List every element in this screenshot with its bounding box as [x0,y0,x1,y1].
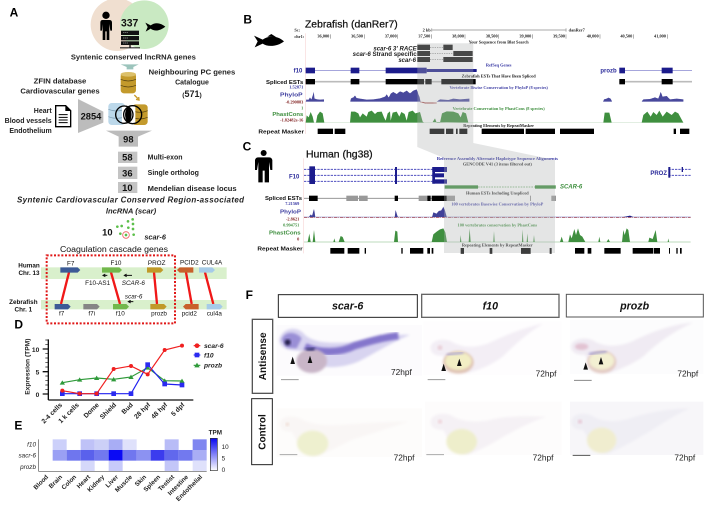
track: PhyloP: 1.52871 [289,84,303,89]
10 scar genes dot cluster [102,218,167,241]
chart legend: scar-6 [204,343,224,350]
heading: human hg38: Human (hg38) [306,149,373,160]
heatmap colour bar: 10 [222,444,229,451]
row header: antisense [252,319,273,393]
gene track: PROZ: PROZ [650,171,667,177]
gene track: SCAR-6: SCAR-6 [560,185,583,191]
browser scale and ruler: 37,500 [418,34,430,39]
heatmap row labels: f10 [27,441,36,448]
chromosome labels: Human [18,263,40,270]
heading: syntenic cardiovascular scar [17,196,245,216]
track captions: 100 vertebrates Basewise Conservation by PhyloP [451,202,544,207]
x axis labels: 2-4 cells [41,402,64,425]
panel letter C: C [243,139,252,153]
track captions: Your Sequence from Blat Search [469,39,529,44]
browser scale and ruler: 38,000 [452,34,464,39]
human genes: PCID2 [180,259,199,266]
chart legend [194,343,224,370]
y axis: 0 [36,392,40,399]
track: PhastCons: 1 [301,106,303,111]
panel letter A: A [10,6,19,20]
track captions: Repeating Elements by RepeatMasker [463,123,534,128]
panel letter B: B [243,12,252,26]
panel D: expression line chart [14,317,224,425]
browser scale and ruler: 36,500 [351,34,363,39]
antisense transcripts: scar-6 [125,293,143,300]
row header: control: Control [257,414,268,450]
track: repeat masker: Repeat Masker [257,247,304,253]
heatmap colour bar: TPM [209,429,222,436]
arrow: teal down [121,64,139,69]
track captions: Reference Assembly Alternate Haplotype Sequence Alignments [437,156,558,161]
browser scale and ruler: Sc: [294,27,301,32]
track captions: Repeating Elements by RepeatMasker [462,243,533,248]
gray arrow: 2854: 2854 [81,111,102,121]
filter step: 10 mendelian disease locus: 10 [122,183,133,193]
chromosome labels: Zebrafish [9,299,38,306]
label: heart, blood vessels, endothelium: Endothelium [9,128,52,135]
browser scale and ruler [294,27,667,39]
y axis [24,339,193,400]
filter step: 58 multi-exon: Multi-exon [148,154,183,161]
heading: zebrafish danRer7: Zebrafish (danRer7) [305,19,398,30]
filter step: 58 multi-exon [118,152,183,163]
filter step: 10 mendelian disease locus: Mendelian disease locus [148,186,237,193]
pink base line [303,158,305,253]
photo: f10 antisense embryo [423,322,562,380]
zebrafish genes: pcid2 [182,311,197,318]
browser scale and ruler: 40,500 [620,34,632,39]
chromosome bands [41,267,227,309]
panel A: coagulation cascade synteny [9,245,227,323]
track: repeat masker: Repeat Masker [258,129,305,135]
zebrafish genes: prozb [151,311,167,318]
heading: syntenic cardiovascular scar: lncRNA (scar) [106,207,157,216]
photo: f10 control embryo [425,402,562,462]
track: PhastCons [269,222,691,242]
heatmap colour bar: 0 [222,467,226,474]
track: PhyloP: PhyloP [280,92,303,98]
10 scar genes dot cluster: scar-6 [144,232,167,241]
browser scale and ruler: chr1: [294,34,305,39]
gene track: PROZ [650,167,691,178]
track: repeat masker [257,247,682,254]
label: neighbouring PC genes catalogue: Neighbouring PC genes [149,70,235,77]
photo: prozb antisense embryo: 72hpf [677,368,699,378]
chromosome labels: Chr. 1 [15,306,33,313]
column header: scar-6 [278,295,417,317]
zebrafish genes: cul4a [207,311,222,318]
icon: gold database [121,72,136,93]
photo: prozb control embryo: 72hpf [674,452,696,462]
label: syntenic conserved lncRNA genes: Syntenic conserved lncRNA genes [71,54,196,61]
track: spliced ESTs [266,79,692,86]
browser scale and ruler: 40,000 [587,34,599,39]
browser scale and ruler: 41,000 [654,34,666,39]
filter step: 36 single ortholog: Single ortholog [148,170,199,177]
track captions: RefSeq Genes [486,62,512,67]
x axis labels [41,401,187,425]
label: neighbouring PC genes catalogue: (571) [182,89,202,99]
human genes [60,259,223,273]
track: PhastCons: PhastCons [269,230,301,236]
icon: zebrafish [254,34,284,47]
heatmap column labels: Testist [157,473,177,493]
heatmap column labels: Spleen [142,474,162,493]
heatmap column labels: Brain [48,474,64,490]
label: ZFIN database cardiovascular genes [20,78,100,95]
x axis labels: 48 hpf [150,401,170,421]
heading: syntenic cardiovascular scar: Syntenic Cardiovascular Conserved Region-associated [17,196,245,205]
label: neighbouring PC genes catalogue [149,70,235,99]
heatmap cells [39,439,207,471]
track: PhyloP: PhyloP [280,209,301,215]
track: repeat masker [258,129,689,135]
track captions [437,156,558,248]
blat alignments: scar-6: scar-6 Strand specific [353,52,417,58]
browser scale and ruler: 36,000 [317,34,329,39]
zebrafish genes [55,304,223,318]
gene track: F10 [289,166,447,184]
heatmap colour bar [209,429,229,474]
series: prozb [60,365,185,385]
filter step: 10 mendelian disease locus [118,182,237,193]
icon: intersecting databases [108,103,148,125]
antisense transcripts: F10-AS1 [85,280,111,287]
label: ZFIN database cardiovascular genes: Cardiovascular genes [20,88,100,95]
heatmap row labels: prozb [19,464,36,471]
row header: control [252,399,272,465]
venn diagram: human and fish overlap [91,0,169,51]
heatmap column labels: Liver [104,473,120,489]
panel letter F: F [246,288,253,302]
browser scale and ruler: 39,500 [553,34,565,39]
x axis labels: Bud [121,402,135,416]
column header: f10 [422,294,559,317]
browser scale and ruler: 2 kb [423,27,431,32]
chromosome labels [9,263,40,313]
row header: antisense: Antisense [258,332,269,380]
x axis labels: Shield [99,402,118,421]
browser scale and ruler: 37,000 [385,34,397,39]
series: f10 [60,362,184,396]
heatmap column labels: Endothelial [175,474,204,503]
gene track: SCAR-6 [445,185,583,191]
label: ZFIN database cardiovascular genes: ZFIN database [34,78,86,85]
arrow: gold diagonal [134,95,139,100]
human genes: F10 [111,260,122,267]
track: PhyloP: -0.290883 [286,100,304,105]
filter step: 58 multi-exon: 58 [122,153,133,163]
photo: scar-6 control embryo [277,408,422,462]
pink base line [304,33,306,134]
filter step: 36 single ortholog: 36 [122,169,133,179]
panel E: tissue heatmap [14,418,229,503]
x axis labels: Dome [83,402,101,420]
orthology links [61,272,213,304]
label: heart, blood vessels, endothelium: Heart [34,108,52,115]
panel C: human genome browser [243,139,691,254]
photo: scar-6 antisense embryo: 72hpf [391,367,413,377]
column header: f10: f10 [483,301,498,313]
photo: scar-6 antisense embryo [277,325,422,380]
browser scale and ruler: danRer7 [569,27,586,32]
panel B: zebrafish genome browser [243,12,692,135]
venn diagram: human and fish overlap: 337 [121,18,138,30]
blat alignments: scar-6: scar-6 3' RACE [373,46,418,52]
y axis: 10 [32,347,40,354]
label: heart, blood vessels, endothelium [5,108,52,135]
funnel: 98 [106,131,152,147]
heatmap column labels: Skin [134,474,148,488]
y axis: 5 [36,370,40,377]
heatmap column labels: Blood [32,474,50,491]
homology highlight band from zebrafish to human [417,43,555,253]
track: PhastCons [272,106,683,123]
blat alignments: scar-6 [353,45,473,64]
track: spliced ESTs: Spliced ESTs [266,80,303,86]
track captions: Human ESTs Including Unspliced [466,190,529,195]
human genes: CUL4A [202,259,223,266]
chart legend: prozb [203,363,222,370]
human genes: F7 [67,261,75,268]
label: neighbouring PC genes catalogue: Catalogue [175,79,209,86]
heatmap row labels: sacr-6 [19,453,36,460]
human genes: PROZ [148,260,166,267]
gene track: f10: f10 [294,69,303,75]
red dashed box [47,255,175,323]
panel A: lncRNA selection funnel [5,0,245,241]
track: PhyloP [280,201,691,221]
track captions: GENCODE V41 (3 items filtered out) [463,161,532,166]
track captions: Vertebrate Biwise Conservation by PhyloP (8 species) [449,85,548,90]
antisense transcripts: SCAR-6 [122,280,145,287]
blat alignments: scar-6: scar-6 [398,58,417,64]
x axis labels: 5 dpf [170,401,187,418]
heatmap column labels: Kidney [86,473,106,494]
heatmap column labels: Muscle [114,473,134,494]
heatmap column labels: Heart [76,473,93,490]
column header: prozb [566,294,703,317]
heatmap row labels [19,441,36,471]
photo: prozb control embryo [570,402,703,462]
photo: scar-6 control embryo: 72hpf [394,452,415,462]
track captions: 100 vertebrates conservation by PhastCons [458,222,537,227]
zebrafish genes: f7 [59,311,65,318]
column header: scar-6: scar-6 [332,301,363,313]
10 scar genes dot cluster: 10 [102,228,113,238]
gray arrow: 2854 [78,99,103,133]
y axis: Expression (TPM) [24,339,31,395]
chromosome labels: Chr. 13 [18,270,40,277]
track: PhastCons: 0 [297,237,299,242]
track: PhastCons: 0.994751 [283,222,299,227]
heatmap column labels: Colon [60,474,78,491]
x axis labels: 28 hpf [133,401,153,421]
x axis labels: 1 k cells [57,402,81,425]
label: heart, blood vessels, endothelium: Blood vessels [5,118,52,125]
gene track: prozb [600,68,692,75]
series: scar-6 [60,344,184,396]
track: PhyloP: 7.21569 [285,201,299,206]
browser scale and ruler: 38,500 [486,34,498,39]
track: spliced ESTs [265,196,556,202]
track: PhastCons: PhastCons [272,112,303,118]
track: PhyloP [280,84,683,105]
track: PhyloP: -2.8621 [286,216,299,221]
browser scale and ruler: 39,000 [519,34,531,39]
track captions: Vertebrate Conservation by PhastCons (8 species) [453,106,545,111]
column header: prozb: prozb [619,301,650,313]
track: spliced ESTs: Spliced ESTs [265,196,302,202]
filter step: 36 single ortholog [118,167,199,179]
funnel: 98: 98 [123,134,134,144]
icon: document [56,106,71,127]
track captions: Zebrafish ESTs That Have Been Spliced [462,74,536,79]
panel F: in situ hybridisation [246,288,703,465]
chart legend: f10 [204,352,214,359]
photo: prozb antisense embryo [570,320,703,380]
zebrafish genes: f7i [88,311,95,318]
gene track: F10: F10 [289,174,300,180]
gene track: f10 [294,68,477,75]
photo: f10 antisense embryo: 72hpf [536,368,557,378]
zebrafish genes: f10 [116,311,125,318]
antisense transcripts [85,274,145,303]
panel letter E: E [14,418,22,432]
heading: coagulation cascade genes: Coagulation cascade genes [60,245,168,254]
heatmap column labels [32,473,204,503]
photo: f10 control embryo: 72hpf [533,452,554,462]
track captions [449,39,548,128]
icon: human [255,150,272,182]
heatmap colour bar: 5 [222,455,226,462]
panel letter D: D [14,317,23,331]
gene track: prozb: prozb [600,69,617,75]
track: PhastCons: -1.82482e-16 [280,117,304,122]
heatmap column labels: Intestine [167,473,190,497]
